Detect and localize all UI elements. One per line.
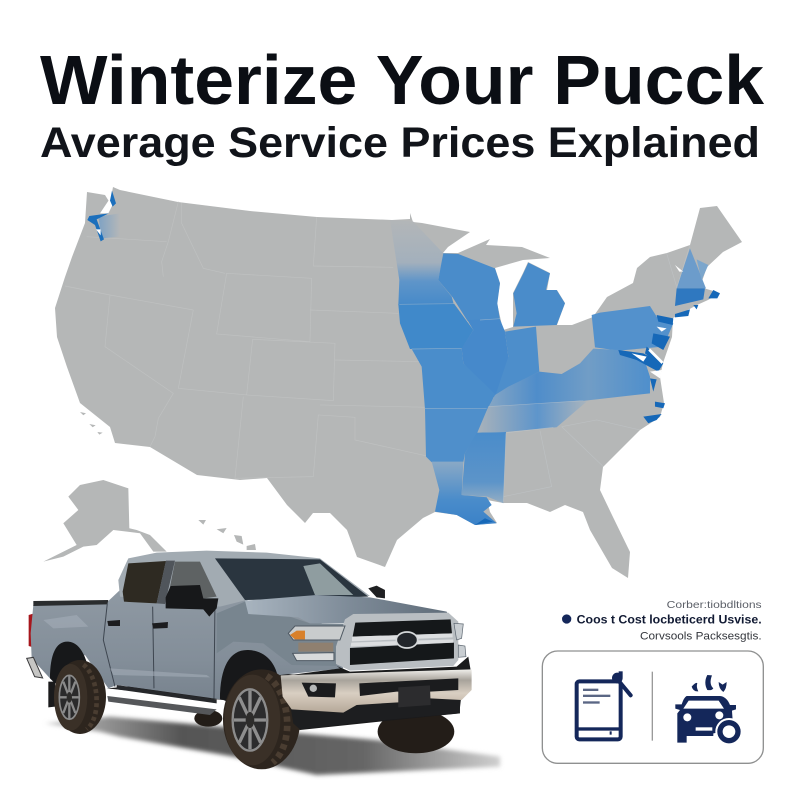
truck: front wheel — [223, 669, 300, 769]
truck: grille frame — [336, 613, 458, 671]
truck: ground shadow — [45, 717, 500, 775]
pickup truck — [27, 551, 500, 775]
map: state borders east — [399, 245, 690, 502]
truck: tail light — [29, 613, 34, 647]
state: Illinois — [462, 319, 508, 398]
state: Mississippi — [462, 432, 506, 503]
legend text — [562, 600, 762, 642]
state: New Hampshire — [677, 248, 706, 288]
truck: rocker rail — [117, 685, 217, 703]
truck: rear bumper — [27, 657, 43, 678]
truck: fender — [217, 602, 344, 666]
state: Wisconsin — [438, 253, 500, 321]
icon card — [542, 651, 763, 763]
map base: contiguous states — [55, 187, 742, 578]
legend: second line: Coos t Cost locbeticerd Usvise. — [577, 612, 762, 626]
truck: fog lamp — [310, 685, 317, 692]
truck: chrome bumper — [281, 669, 472, 713]
map: state borders west — [65, 202, 430, 478]
state: Missouri — [412, 348, 495, 409]
truck: grille mesh — [350, 619, 454, 665]
state: Indiana — [495, 327, 539, 397]
truck: grille badge — [396, 632, 418, 648]
state: Arkansas — [425, 409, 488, 462]
truck: bed rail — [33, 600, 108, 606]
state: Iowa — [398, 304, 473, 349]
truck: side body — [31, 590, 343, 707]
truck: headlights — [288, 626, 345, 661]
truck: door seams and highlights — [103, 600, 215, 698]
state: Minnesota — [390, 220, 454, 305]
truck: grille bars — [351, 633, 453, 647]
card border — [542, 651, 763, 763]
truck: rear wheel — [54, 660, 106, 734]
map: Alaska and Hawaii — [43, 412, 256, 562]
truck: fog light and intake — [302, 678, 458, 697]
subtitle: Average Service Prices Explained — [40, 119, 760, 167]
truck: pillar — [157, 561, 175, 604]
icon: car with steam and wheel — [675, 675, 742, 744]
state: Massachusetts — [675, 288, 705, 306]
truck: under body — [48, 673, 460, 730]
truck: running board — [107, 696, 217, 715]
truck: door handles — [107, 618, 236, 632]
truck: roof and pillars — [118, 551, 370, 607]
state: Pennsylvania — [592, 306, 673, 351]
truck: windshield reflection — [303, 563, 353, 595]
truck: far mirror — [368, 586, 385, 598]
state: Michigan — [513, 263, 565, 327]
legend: third line: Corvsools Packsesgtis. — [640, 630, 762, 642]
truck: hood — [245, 595, 448, 623]
truck: wheel arches — [50, 642, 278, 702]
map: United States service price regions — [43, 187, 742, 578]
map: eastern blue states — [390, 220, 720, 525]
truck: license plate — [398, 685, 431, 707]
truck: far headlights — [454, 623, 466, 657]
title: Winterize Your Pucck — [40, 41, 764, 119]
card divider — [650, 672, 654, 741]
map: Puget Sound coast — [87, 191, 120, 241]
state: Kentucky and Virginia — [488, 349, 650, 407]
truck: front door window — [167, 562, 217, 603]
state: Louisiana — [432, 462, 497, 525]
legend: first line: Corber:tiobdltions — [667, 600, 762, 611]
icon: service manual with wrench — [577, 671, 631, 739]
state: Maine coast — [697, 259, 708, 280]
truck: rear window — [123, 561, 166, 603]
legend: bullet — [562, 614, 571, 624]
truck: far side wheels — [194, 710, 454, 753]
map: coast highlights — [632, 265, 683, 378]
truck: lower fascia — [283, 657, 471, 676]
state: Tennessee — [477, 401, 587, 433]
truck: side mirror — [166, 585, 218, 617]
truck: lower valance — [289, 693, 462, 729]
map: Atlantic coast islands — [475, 290, 720, 525]
truck: windshield — [215, 558, 368, 600]
